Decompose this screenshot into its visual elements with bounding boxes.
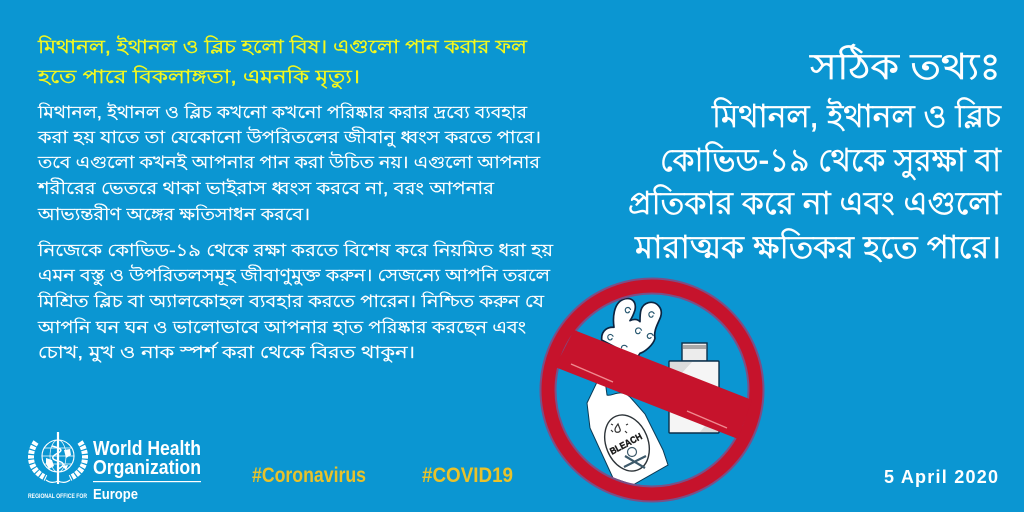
icon: prohibited bleach and bottle — [540, 278, 764, 502]
icon: prohibition ring — [548, 286, 756, 494]
heading: yellow warning: হতে পারে বিকলাঙ্গতা, এমনকি মৃত্যু। — [37, 66, 360, 89]
icon: skull and crossbones — [624, 448, 646, 468]
logo wordmark: REGIONAL OFFICE FOR — [28, 494, 88, 500]
heading: yellow warning: মিথানল, ইথানল ও ব্লিচ হলো বিষ। এগুলো পান করার ফল — [37, 36, 528, 58]
text block: first paragraph: শরীরের ভেতরে থাকা ভাইরাস ধ্বংস করবে না, বরং আপনার — [37, 178, 495, 198]
logo wordmark: World Health — [93, 438, 201, 460]
bottle label text: BLEACH — [608, 431, 644, 458]
text block: first paragraph — [37, 102, 541, 224]
icon: drops on label — [611, 424, 628, 433]
hashtag: COVID19: #COVID19 — [422, 464, 513, 487]
text block: key message: প্রতিকার করে না এবং এগুলো — [628, 184, 1002, 221]
text block: key message — [628, 97, 1002, 265]
icon: plain bottle — [669, 343, 719, 433]
text block: first paragraph: তবে এগুলো কখনই আপনার পান করা উচিত নয়। এগুলো আপনার — [37, 152, 541, 172]
text block: key message: মিথানল, ইথানল ও ব্লিচ — [711, 97, 1002, 134]
logo wordmark — [28, 438, 201, 503]
text block: second paragraph: এমন বস্তু ও উপরিতলসমূহ জীবাণুমুক্ত করুন। সেজন্যে আপনি তরলে — [38, 265, 550, 286]
text block: second paragraph: আপনি ঘন ঘন ও ভালোভাবে আপনার হাত পরিষ্কার করছেন এবং — [37, 317, 526, 337]
icon: vapour swirls — [602, 299, 661, 358]
logo wordmark: Organization — [93, 457, 201, 479]
text block: first paragraph: মিথানল, ইথানল ও ব্লিচ কখনো কখনো পরিষ্কার করার দ্রব্যে ব্যবহার — [37, 102, 528, 122]
text block: first paragraph: আভ্যন্তরীণ অঙ্গের ক্ষতিসাধন করবে। — [37, 204, 310, 224]
text block: first paragraph: করা হয় যাতে তা যেকোনো উপরিতলের জীবানু ধ্বংস করতে পারে। — [37, 127, 541, 147]
text block: second paragraph — [37, 240, 554, 362]
heading: yellow warning — [37, 36, 528, 89]
logo: WHO Europe — [28, 432, 201, 503]
text block: second paragraph: নিজেকে কোভিড-১৯ থেকে রক্ষা করতে বিশেষ করে নিয়মিত ধরা হয় — [37, 240, 554, 260]
icon: WHO emblem — [31, 432, 85, 484]
text block: key message: কোভিড-১৯ থেকে সুরক্ষা বা — [660, 141, 1002, 180]
icon: bleach bottle — [587, 380, 668, 485]
text block: second paragraph: চোখ, মুখ ও নাক স্পর্শ করা থেকে বিরত থাকুন। — [38, 342, 415, 362]
date: 5 April 2020 — [884, 467, 998, 487]
logo wordmark: Europe — [93, 486, 138, 503]
text block: key message: মারাত্মক ক্ষতিকর হতে পারে। — [634, 228, 1001, 265]
hashtag: Coronavirus: #Coronavirus — [252, 464, 366, 487]
title: correct fact: সঠিক তথ্যঃ — [809, 44, 1001, 87]
icon: prohibition bar — [555, 330, 752, 439]
text block: second paragraph: মিশ্রিত ব্লিচ বা অ্যালকোহল ব্যবহার করতে পারেন। নিশ্চিত করুন যে — [37, 291, 545, 311]
bar highlights — [571, 364, 727, 428]
